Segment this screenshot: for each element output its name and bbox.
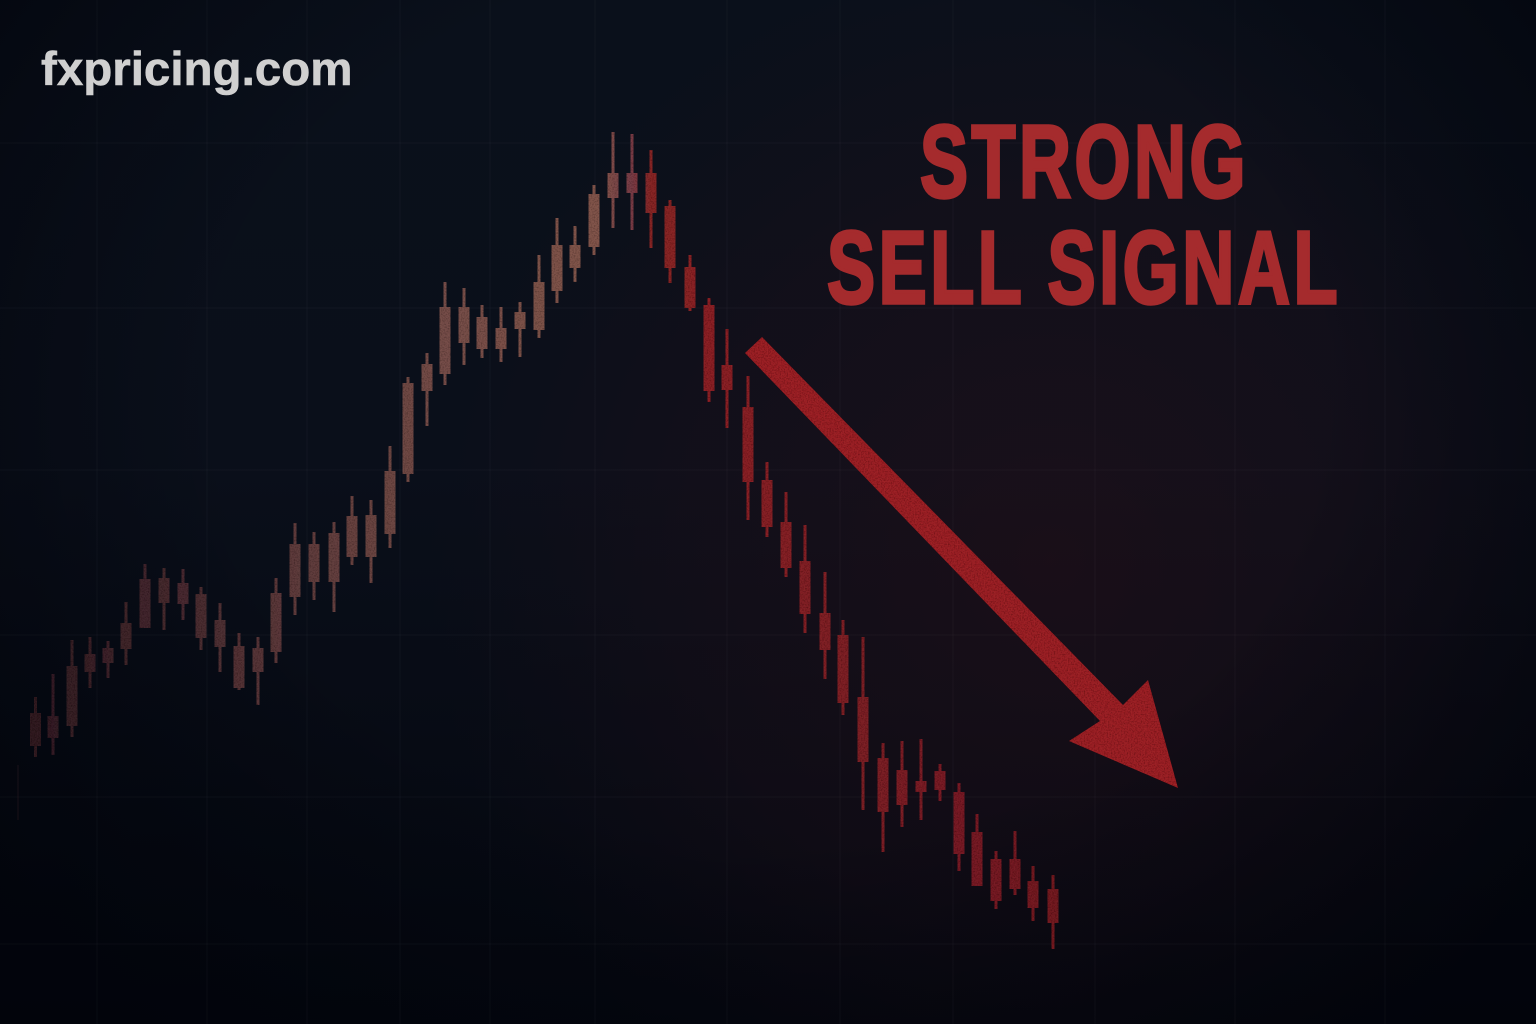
candlestick chart [30, 132, 1058, 949]
heading: strong sell signal [827, 104, 1341, 325]
falling candles: downtrend after the peak [626, 134, 1058, 949]
arrow: downward sell arrow [745, 337, 1178, 788]
logo: fxpricing.com: fxpricing.com [41, 43, 352, 96]
rising candles: uptrend to the peak [30, 132, 618, 757]
heading line 1: STRONG [920, 104, 1249, 219]
